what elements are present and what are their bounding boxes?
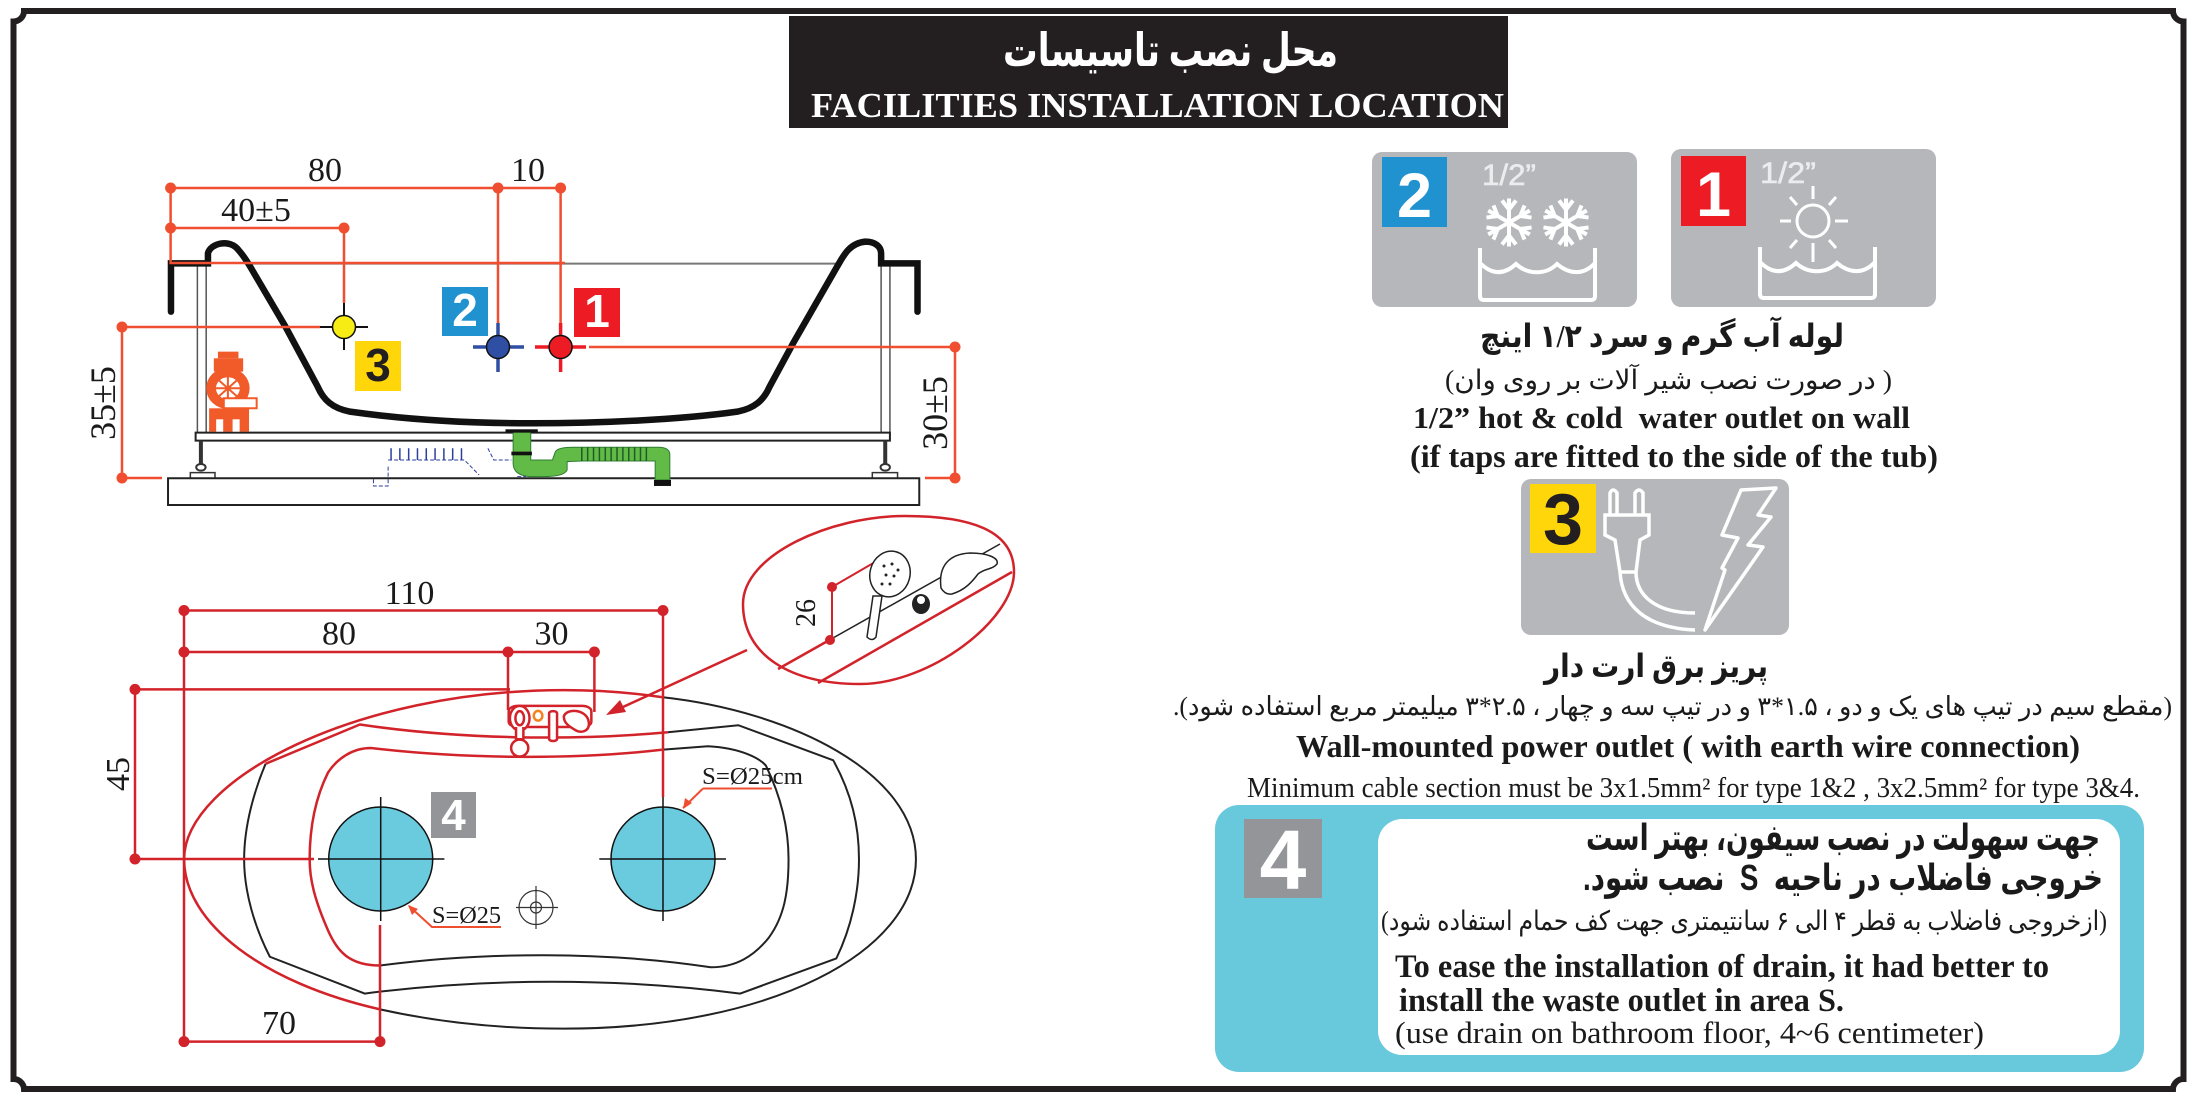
elevation dimension labels: 40±5 <box>221 192 291 229</box>
plan dimension labels: 70 <box>262 1005 296 1042</box>
detail: 26 dimension <box>832 558 882 640</box>
panel: cold water icon: 1/2” <box>1482 159 1536 192</box>
drain note text box: To ease the installation of drain, it had better to <box>1395 949 2049 985</box>
panel: hot water icon: 1/2” <box>1760 157 1816 190</box>
badge 2 <box>442 284 488 336</box>
icon: water basin cold <box>1480 248 1595 300</box>
detail: spout <box>941 553 997 594</box>
text block: water outlet: لوله آب گرم و سرد ۱/۲ اینچ <box>1480 316 1844 355</box>
badge 3 <box>355 339 401 391</box>
panel: hot water icon: 1 <box>1696 160 1731 230</box>
elevation dimension labels: 35±5 <box>83 366 123 440</box>
drain note text box: install the waste outlet in area S. <box>1399 983 1844 1019</box>
text block: power outlet: Minimum cable section must be 3x1.5mm² for type 1&2 , 3x2.5mm² for type 3&4. <box>1247 773 2140 804</box>
badge 4 large <box>1244 813 1322 907</box>
title banner: FACILITIES INSTALLATION LOCATION <box>811 86 1504 125</box>
label S=Ø25cm: S=Ø25cm <box>702 764 803 790</box>
text block: power outlet: پریز برق ارت دار <box>1542 648 1768 685</box>
plan dimension labels: 30 <box>534 616 568 652</box>
plan dimension labels: 80 <box>322 616 356 652</box>
panel: cold water icon: 2 <box>1397 161 1432 231</box>
icon: lightning bolt <box>1705 488 1776 630</box>
detail: knob <box>912 594 930 614</box>
detail: deck edge lines <box>778 638 833 669</box>
bathtub structure and profile <box>168 242 919 505</box>
badge 4 large: 4 <box>1260 813 1307 907</box>
icon: water basin hot <box>1760 247 1875 298</box>
label S=Ø25: S=Ø25 <box>432 903 501 929</box>
badge 4 on plan <box>431 791 476 840</box>
drain area circle right <box>599 797 726 921</box>
icon: plug <box>1605 490 1695 630</box>
badge 1: 1 <box>584 285 610 337</box>
plan diagram: bathtub top view <box>100 516 1014 1047</box>
title banner <box>789 16 1508 128</box>
elevation dimension lines <box>122 188 955 478</box>
outlet marker: blue cold water <box>473 323 524 372</box>
plan dimension lines <box>135 610 663 1042</box>
plan dimension end points <box>130 605 668 1047</box>
outlet marker: red hot water <box>535 323 586 372</box>
badge 4 on plan: 4 <box>441 791 466 840</box>
icon: snowflakes <box>1485 198 1590 246</box>
elevation dimension labels: 80 <box>308 152 342 189</box>
panel: hot water icon <box>1671 149 1936 307</box>
label S=Ø25cm <box>683 764 803 809</box>
panel: drain note <box>1215 805 2144 1072</box>
icon: sun <box>1780 186 1848 262</box>
text block: power outlet: (مقطع سیم در تیپ های یک و دو ، ۱.۵*۳ و در تیپ سه و چهار ، ۲.۵*۳ میلیمتر مربع استفاده شود). <box>1173 692 2172 722</box>
text block: water outlet: (if taps are fitted to the side of the tub) <box>1410 438 1938 474</box>
elevation diagram: bathtub side view <box>83 152 960 505</box>
outlet marker: yellow power point <box>320 303 368 350</box>
panel: power outlet icon <box>1521 479 1789 635</box>
drain note text box: (ازخروجی فاضلاب به قطر ۴ الی ۶ سانتیمتری جهت کف حمام استفاده شود) <box>1381 906 2107 937</box>
text block: water outlet: ( در صورت نصب شیر آلات بر روی وان) <box>1445 364 1892 396</box>
badge 3: 3 <box>365 339 391 391</box>
drain note text box: (use drain on bathroom floor, 4~6 centimeter) <box>1395 1015 1984 1050</box>
badge 2: 2 <box>452 284 478 336</box>
text block: power outlet <box>1173 648 2172 804</box>
icon: overflow fixture <box>516 886 558 929</box>
text block: power outlet: Wall-mounted power outlet ( with earth wire connection) <box>1296 728 2080 764</box>
elevation dimension labels <box>83 152 955 450</box>
drain note text box <box>1378 818 2120 1055</box>
tub outlines <box>184 690 916 1029</box>
text block: water outlet: 1/2” hot & cold water outlet on wall <box>1413 400 1910 435</box>
pointer arrow to detail <box>606 650 747 715</box>
drain area circle left <box>318 797 444 921</box>
badge 1 <box>574 285 620 337</box>
panel: cold water icon <box>1372 152 1637 307</box>
detail: hand shower <box>865 547 915 640</box>
detail callout ellipse: 26 <box>791 599 822 627</box>
icon: pump <box>206 352 257 432</box>
detail callout ellipse <box>743 516 1014 684</box>
plan dimension labels <box>100 575 568 1042</box>
drain siphon <box>373 429 671 486</box>
elevation dimension end points <box>116 182 960 484</box>
panel: power outlet icon: 3 <box>1543 480 1583 560</box>
drain note text box: خروجی فاضلاب در ناحیه S نصب شود. <box>1583 857 2103 899</box>
elevation dimension labels: 10 <box>511 152 545 189</box>
plan dimension labels: 45 <box>100 757 137 791</box>
faucet group on plan <box>509 706 591 756</box>
title banner: محل نصب تاسیسات <box>1003 25 1338 76</box>
text block: water outlet <box>1410 316 1938 474</box>
plan dimension labels: 110 <box>385 575 434 612</box>
elevation dimension labels: 30±5 <box>915 376 955 450</box>
